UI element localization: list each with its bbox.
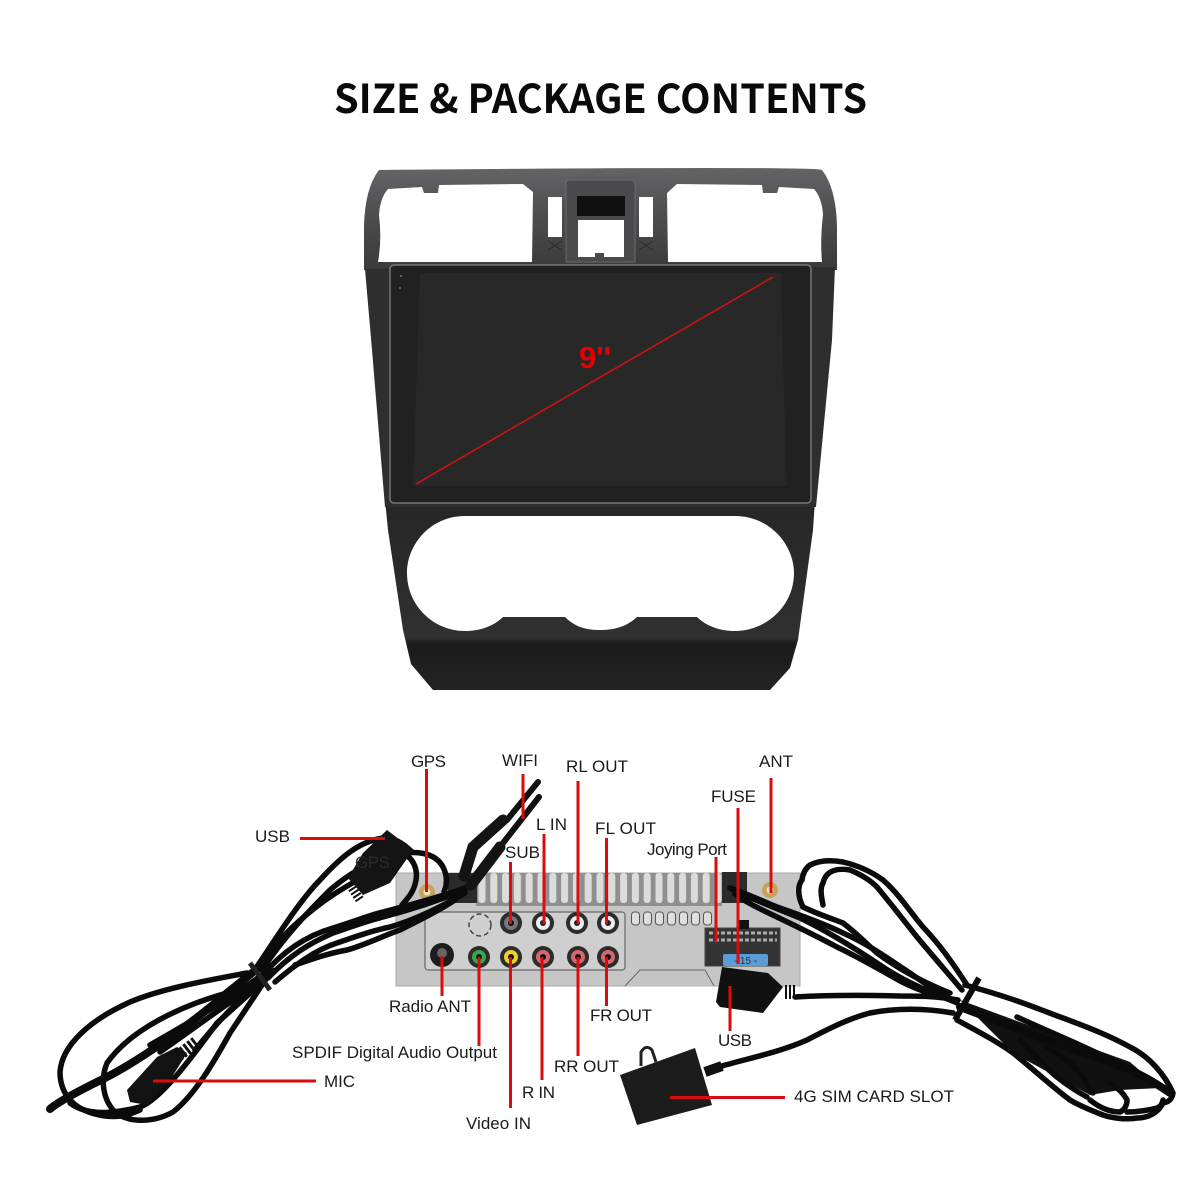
angled plate [625, 970, 714, 986]
port labels: FL OUT [595, 819, 656, 838]
lower fascia with HVAC cutout [385, 500, 815, 690]
port labels: ANT [759, 752, 793, 771]
mic dots [399, 275, 402, 289]
screen [390, 265, 811, 503]
port labels: 4G SIM CARD SLOT [794, 1087, 954, 1106]
fuse: - 15 - [734, 956, 757, 967]
RCA sockets [430, 912, 619, 968]
port labels: FR OUT [590, 1006, 652, 1025]
display area [413, 273, 787, 486]
WIFI leads [464, 782, 539, 885]
radio rear chassis [396, 872, 800, 986]
left cable bundle [50, 782, 539, 1120]
port labels: USB [718, 1031, 752, 1050]
GPS gold connector [419, 884, 435, 900]
right cable bundle [620, 861, 1173, 1125]
port labels: GPS [411, 752, 446, 771]
title: SIZE & PACKAGE CONTENTS [334, 67, 867, 125]
port labels: USB [255, 827, 290, 846]
callout leader lines [153, 769, 785, 1108]
fascia bezel [365, 267, 835, 507]
port labels [255, 751, 954, 1133]
fuse [723, 954, 768, 967]
cooling fins [476, 873, 722, 906]
port labels: FUSE [711, 787, 756, 806]
upper USB plug [348, 830, 413, 895]
port labels: MIC [324, 1072, 355, 1091]
port labels: Joying Port [647, 840, 727, 859]
ghost GPS label on cable: GPS [355, 853, 390, 872]
port labels: RR OUT [554, 1057, 619, 1076]
port labels: WIFI [502, 751, 538, 770]
upper fascia frame [364, 168, 837, 270]
harness connector [705, 920, 780, 966]
port labels: Video IN [466, 1114, 531, 1133]
size label: 9'' [579, 340, 611, 375]
head unit with fascia [364, 168, 837, 690]
port labels: SPDIF Digital Audio Output [292, 1043, 497, 1062]
4G SIM box [620, 1047, 722, 1125]
input/output panel [425, 912, 625, 970]
port labels: R IN [522, 1083, 555, 1102]
port labels: L IN [536, 815, 567, 834]
vent slots [630, 911, 714, 926]
cable tie [250, 963, 270, 990]
port labels: RL OUT [566, 757, 628, 776]
port labels: SUB [505, 843, 540, 862]
lower USB plug [716, 967, 783, 1013]
diagonal size line [416, 277, 773, 484]
dashed port [469, 914, 491, 936]
mic plug [127, 1042, 196, 1105]
center module [548, 180, 653, 262]
port labels: Radio ANT [389, 997, 471, 1016]
right loop [960, 1000, 1160, 1095]
ANT gold connector [762, 882, 778, 898]
cable tie [955, 978, 979, 1020]
cable exit blocks [448, 872, 747, 903]
